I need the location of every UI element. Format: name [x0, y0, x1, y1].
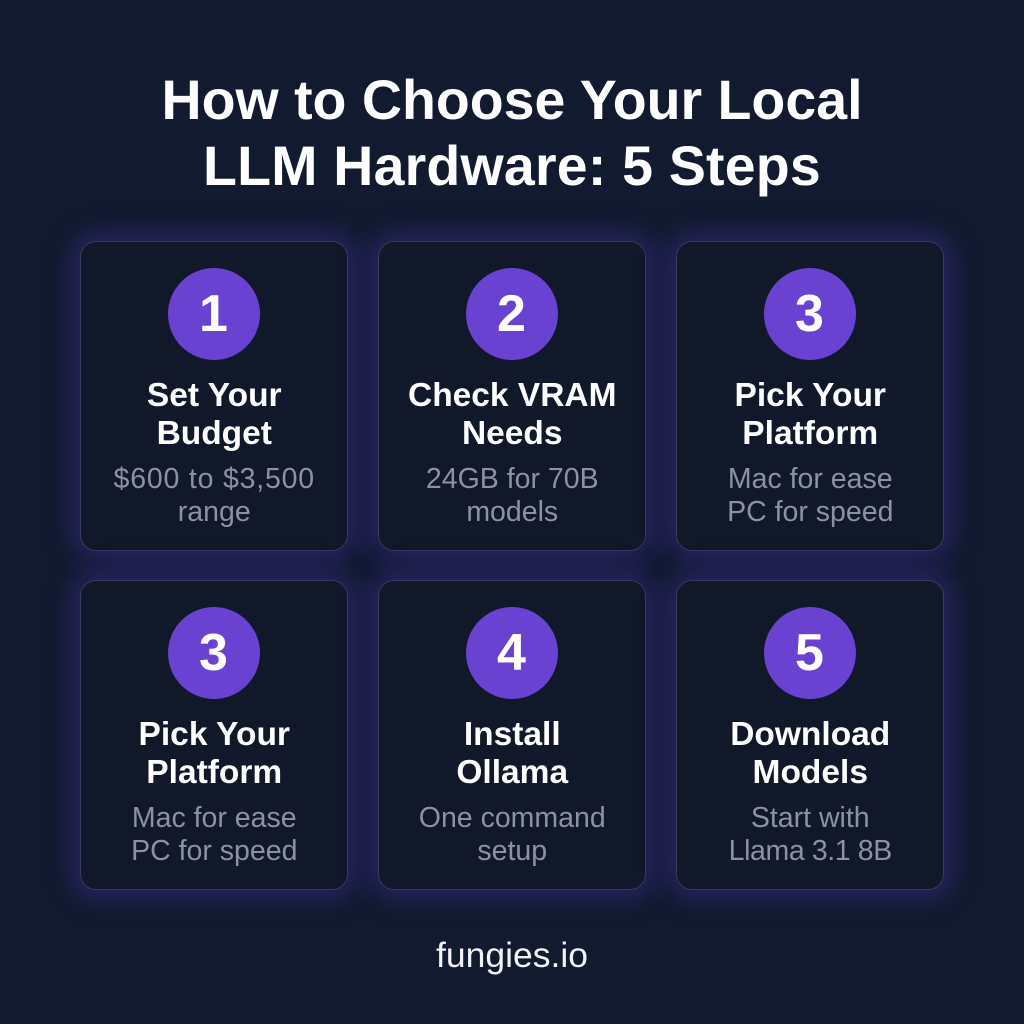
text: platform guidance repeated: Mac for ease — [132, 802, 297, 834]
panel: step 4 install ollama — [378, 580, 646, 890]
text: platform guidance: Mac for ease — [728, 463, 893, 495]
text: platform guidance repeated — [131, 802, 297, 867]
panel: step 1 set your budget — [80, 241, 348, 550]
text: vram guidance: models — [466, 496, 558, 528]
panel: step 3 pick your platform — [676, 241, 944, 550]
text: model guidance: Start with — [751, 802, 870, 834]
heading: pick your platform — [735, 377, 886, 452]
heading: pick your platform repeated — [139, 716, 290, 791]
heading: set your budget — [147, 377, 282, 452]
heading: install ollama — [456, 716, 568, 791]
heading: download models: Download — [730, 716, 890, 753]
heading: check vram needs: Check VRAM — [408, 377, 616, 414]
step number 4: 4 — [497, 624, 526, 682]
title: How to Choose Your Local — [162, 69, 862, 131]
heading: set your budget: Budget — [157, 415, 272, 452]
text: budget range: $600 to $3,500 — [114, 463, 315, 495]
heading: download models: Models — [753, 754, 868, 791]
text: setup guidance: One command — [419, 802, 606, 834]
step number 5: 5 — [795, 624, 824, 682]
heading: check vram needs: Needs — [462, 415, 563, 452]
text: vram guidance — [426, 463, 599, 528]
step number 3 repeated — [168, 606, 260, 698]
text: model guidance: Llama 3.1 8B — [729, 835, 892, 867]
step number 2: 2 — [497, 284, 526, 342]
text: model guidance — [729, 802, 892, 867]
step number 4 — [466, 606, 558, 698]
text: setup guidance — [419, 802, 606, 867]
panel: repeated step 3 pick your platform — [80, 580, 348, 890]
title — [162, 69, 862, 197]
panel: step 2 check vram needs — [378, 241, 646, 550]
heading: install ollama: Install — [464, 716, 561, 753]
heading: pick your platform repeated: Pick Your — [139, 716, 290, 753]
text: platform guidance — [727, 463, 893, 528]
heading: install ollama: Ollama — [456, 754, 568, 791]
step number 3: 3 — [795, 284, 824, 342]
text: budget range — [114, 463, 315, 528]
text: budget range: range — [178, 496, 251, 528]
step number 2 — [466, 268, 558, 360]
step number 3 repeated: 3 — [199, 624, 228, 682]
step number 1: 1 — [199, 284, 228, 342]
heading: download models — [730, 716, 890, 791]
text: platform guidance: PC for speed — [727, 496, 893, 528]
step number 1 — [168, 268, 260, 360]
text: setup guidance: setup — [477, 835, 547, 867]
heading: pick your platform: Platform — [742, 415, 878, 452]
step number 3 — [764, 268, 856, 360]
footer brand: fungies.io — [436, 935, 588, 975]
heading: check vram needs — [408, 377, 616, 452]
step number 5 — [764, 606, 856, 698]
text: platform guidance repeated: PC for speed — [131, 835, 297, 867]
panel: step 5 download models — [676, 580, 944, 890]
heading: pick your platform: Pick Your — [735, 377, 886, 414]
title: LLM Hardware: 5 Steps — [203, 135, 821, 197]
heading: set your budget: Set Your — [147, 377, 282, 414]
text: vram guidance: 24GB for 70B — [426, 463, 599, 495]
heading: pick your platform repeated: Platform — [146, 754, 282, 791]
